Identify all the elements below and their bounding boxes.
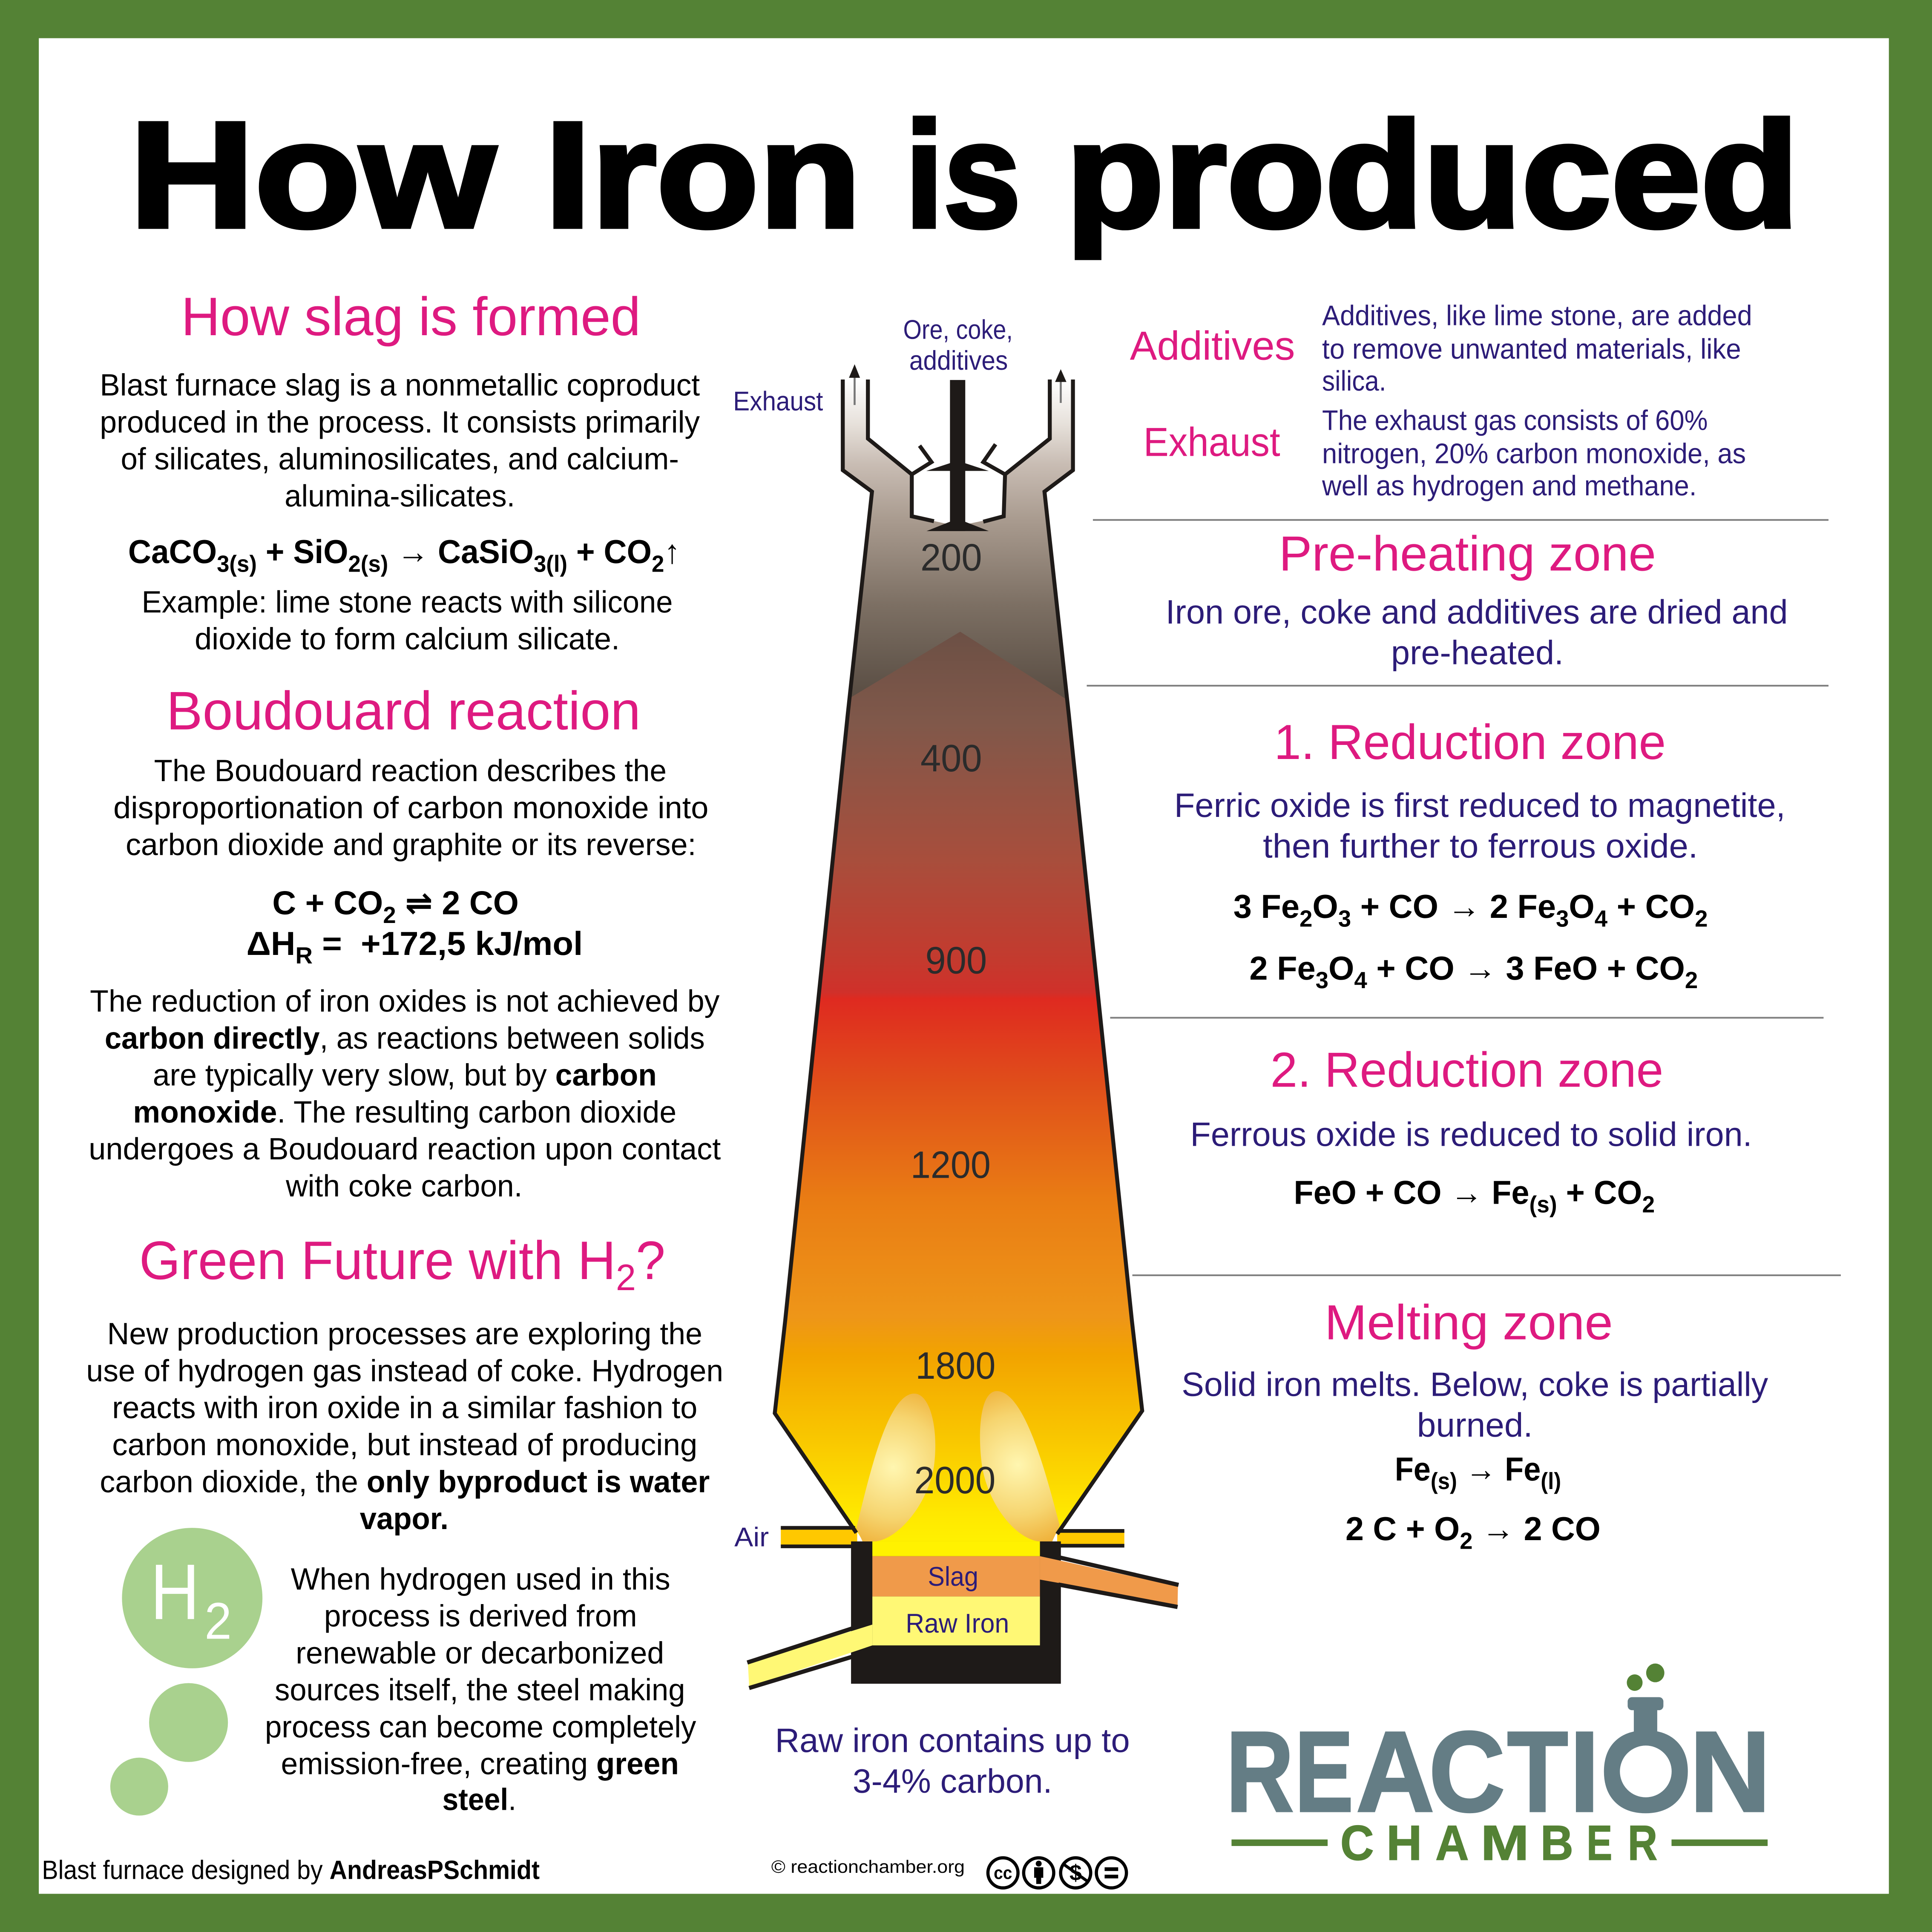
equation: slag formation: + SiO: [257, 534, 348, 570]
label: slag: Slag: [928, 1561, 978, 1592]
logo word: chamber: A: [1435, 1817, 1469, 1871]
text block: raw iron carbon note: [775, 1721, 1130, 1800]
label: air: Air: [734, 1522, 769, 1552]
icons: creative commons licence: [988, 1858, 1127, 1888]
logo word: reaction: N: [1690, 1708, 1771, 1836]
equation: boudouard: = +172,5 kJ/mol: [313, 926, 583, 962]
logo word: reaction: I: [1570, 1708, 1599, 1836]
logo word: chamber: H: [1386, 1817, 1422, 1871]
text block: slag description: [100, 368, 701, 514]
left air pipe: [781, 1528, 857, 1547]
title: [129, 91, 1799, 259]
title: is: [905, 91, 1021, 259]
equation: slag formation: 2(s): [348, 552, 388, 578]
panel: first reduction zone: [1174, 716, 1785, 995]
text block: pre-heating: [1166, 592, 1788, 672]
temperature labels: 400: [920, 737, 982, 780]
arrow: exhaust right: [1055, 369, 1067, 403]
equations: first reduction: 3: [1316, 969, 1328, 995]
title: produced: [1066, 91, 1799, 259]
equations: first reduction: 3 Fe: [1233, 888, 1300, 926]
equations: first reduction: 4: [1354, 969, 1368, 995]
text block: additives: silica.: [1322, 365, 1386, 397]
hearth: [851, 1541, 1061, 1684]
text block: hydrogen processes: vapor.: [360, 1502, 448, 1536]
logo word: chamber: R: [1628, 1817, 1657, 1871]
equations: first reduction: O: [1569, 888, 1595, 926]
equations: first reduction: 3: [1556, 907, 1569, 933]
equation: slag formation: + CO: [567, 534, 652, 570]
logo flask: [1613, 1664, 1679, 1805]
temperature labels: 2000: [914, 1459, 995, 1502]
equation: second reduction: (s): [1530, 1193, 1557, 1219]
arrow: exhaust left: [849, 364, 860, 405]
icon: non commercial: $: [1070, 1860, 1082, 1885]
furnace lower hot body: [775, 632, 1142, 1556]
icon: attribution: [1024, 1858, 1054, 1888]
equation: boudouard: R: [296, 944, 313, 970]
logo word: reaction: C: [1429, 1708, 1505, 1836]
text block: additives: Additives, like lime stone, are added: [1322, 299, 1752, 331]
equation: boudouard: C + CO: [272, 885, 384, 922]
blast furnace diagram: [733, 314, 1179, 1688]
equations: first reduction: O: [1312, 888, 1338, 926]
raw iron tap: [748, 1624, 872, 1688]
panel: how slag is formed: [100, 287, 701, 657]
text block: hydrogen processes: [86, 1317, 723, 1536]
flame right: [980, 1391, 1060, 1541]
text block: slag example: Example: lime stone reacts with silicone: [142, 585, 673, 620]
text block: melting: burned.: [1417, 1406, 1533, 1444]
text block: first reduction: Ferric oxide is first reduced to magnetite,: [1174, 786, 1785, 824]
text block: green steel: process can become completely: [265, 1710, 697, 1745]
text block: iron oxide reduction: [89, 984, 721, 1204]
equation: slag formation: 3(l): [534, 552, 567, 578]
label: raw iron: Raw Iron: [906, 1608, 1009, 1639]
temperature labels: 900: [926, 939, 987, 982]
text block: iron oxide reduction: carbon directly, as reactions between solids: [105, 1021, 705, 1056]
equation: boudouard: [247, 885, 583, 970]
logo word: chamber: M: [1481, 1817, 1529, 1871]
text block: second reduction: Ferrous oxide is reduced to solid iron.: [1190, 1115, 1752, 1153]
equation: slag formation: 3(s): [217, 552, 257, 578]
equations: melting: [1346, 1451, 1601, 1555]
equation: slag formation: 2: [652, 552, 664, 578]
equations: first reduction: 3: [1338, 907, 1351, 933]
title: How: [129, 91, 497, 259]
panel: melting zone: [1182, 1296, 1768, 1555]
charging rod and cones: [926, 380, 989, 531]
credit: furnace designer: Blast furnace designed by AndreasPSchmidt: [42, 1856, 540, 1885]
text block: hydrogen processes: use of hydrogen gas instead of coke. Hydrogen: [86, 1354, 723, 1389]
label: ore coke additives: [903, 314, 1013, 376]
icon: non commercial: [1061, 1858, 1091, 1888]
heading: green future: ?: [636, 1231, 665, 1291]
heading: green future: Green Future with H: [139, 1231, 627, 1291]
panel: exhaust: [1144, 404, 1746, 501]
icon: cc: cc: [994, 1864, 1012, 1884]
text block: first reduction: then further to ferrous oxide.: [1263, 827, 1698, 865]
text block: boudouard intro: carbon dioxide and graphite or its reverse:: [126, 828, 696, 862]
slag tap: [1040, 1556, 1179, 1607]
furnace outline: [775, 380, 1142, 1534]
temperature labels: [911, 536, 995, 1502]
equations: melting: (l): [1541, 1469, 1561, 1495]
text block: boudouard intro: disproportionation of carbon monoxide into: [113, 791, 708, 825]
right air pipe: [1057, 1530, 1124, 1547]
text block: slag example: [142, 585, 673, 657]
text block: pre-heating: pre-heated.: [1391, 633, 1564, 672]
temperature labels: 1800: [915, 1344, 995, 1387]
panel: additives: [1130, 299, 1752, 397]
equations: first reduction: O: [1328, 950, 1354, 987]
heading: melting zone: Melting zone: [1325, 1296, 1613, 1351]
text block: green steel: renewable or decarbonized: [296, 1636, 664, 1671]
equations: first reduction: 4: [1595, 907, 1608, 933]
text block: slag description: alumina-silicates.: [285, 479, 515, 514]
equation: slag formation: ↑: [664, 534, 680, 570]
text block: exhaust: [1321, 404, 1746, 501]
icon: cc: [988, 1858, 1018, 1888]
title: Iron: [545, 91, 861, 259]
text block: slag description: Blast furnace slag is a nonmetallic coproduct: [100, 368, 700, 403]
equations: melting: 2 C + O: [1346, 1511, 1461, 1547]
text block: iron oxide reduction: undergoes a Boudouard reaction upon contact: [89, 1133, 721, 1167]
equations: first reduction: + CO: [1607, 888, 1695, 926]
logo word: reaction: O: [1600, 1708, 1692, 1836]
temperature labels: 200: [920, 536, 982, 579]
label: ore coke additives: additives: [909, 345, 1008, 376]
logo word: reaction: T: [1507, 1708, 1568, 1836]
text block: raw iron carbon note: 3-4% carbon.: [853, 1762, 1052, 1800]
text block: green steel: emission-free, creating green: [281, 1747, 679, 1782]
equation: boudouard: ⇌ 2 CO: [396, 885, 519, 922]
text block: green steel: [265, 1562, 697, 1817]
text block: exhaust: nitrogen, 20% carbon monoxide, as: [1322, 437, 1746, 469]
temperature labels: 1200: [911, 1144, 991, 1187]
text block: additives: to remove unwanted materials, like: [1322, 333, 1741, 365]
text block: green steel: process is derived from: [324, 1599, 637, 1634]
equations: melting: → Fe: [1457, 1451, 1541, 1488]
text block: slag description: of silicates, aluminosilicates, and calcium-: [121, 443, 679, 477]
equation: boudouard: 2: [383, 903, 396, 929]
panel: second reduction zone: [1190, 1044, 1752, 1219]
text block: slag description: produced in the process. It consists primarily: [100, 405, 701, 440]
equations: first reduction: + CO → 3 FeO + CO: [1367, 950, 1685, 987]
equation: boudouard: ΔH: [247, 926, 294, 962]
text block: boudouard intro: The Boudouard reaction describes the: [154, 754, 667, 788]
heading: green future: 2: [616, 1258, 636, 1299]
equations: first reduction: 2: [1685, 969, 1698, 995]
equations: melting: 2: [1460, 1529, 1472, 1555]
equation: second reduction: FeO + CO → Fe: [1294, 1174, 1537, 1211]
heading: 2. reduction zone: 2. Reduction zone: [1271, 1044, 1663, 1098]
text block: iron oxide reduction: with coke carbon.: [285, 1169, 523, 1204]
text block: additives: [1322, 299, 1752, 397]
text block: melting: Solid iron melts. Below, coke is partially: [1182, 1365, 1768, 1403]
text block: slag example: dioxide to form calcium silicate.: [195, 622, 620, 657]
equations: melting: (s): [1431, 1469, 1457, 1495]
logo word: reaction: R: [1226, 1708, 1294, 1836]
text block: exhaust: The exhaust gas consists of 60%: [1322, 404, 1708, 436]
equations: first reduction: 2: [1300, 907, 1312, 933]
equations: first reduction: 2: [1695, 907, 1708, 933]
text block: hydrogen processes: reacts with iron oxide in a similar fashion to: [112, 1391, 697, 1426]
icon: hydrogen bubbles: 2: [204, 1592, 232, 1650]
text block: hydrogen processes: carbon monoxide, but instead of producing: [112, 1428, 697, 1463]
logo word: reaction: E: [1295, 1708, 1354, 1836]
logo: reaction chamber: [1226, 1664, 1771, 1871]
heading: 1. reduction zone: 1. Reduction zone: [1274, 716, 1666, 770]
text block: iron oxide reduction: The reduction of iron oxides is not achieved by: [90, 984, 720, 1019]
logo word: chamber: C: [1340, 1817, 1374, 1871]
logo word: chamber: B: [1541, 1817, 1573, 1871]
icon: hydrogen bubbles: H: [150, 1547, 200, 1636]
heading: additives: Additives: [1130, 323, 1295, 368]
flame left: [857, 1394, 935, 1541]
text block: raw iron carbon note: Raw iron contains up to: [775, 1721, 1130, 1760]
equations: first reduction: + CO → 2 Fe: [1351, 888, 1556, 926]
icon: no derivatives: [1096, 1858, 1127, 1888]
text block: melting: [1182, 1365, 1768, 1444]
text block: green steel: steel.: [443, 1783, 516, 1817]
icon: hydrogen bubbles: [110, 1528, 262, 1816]
heading: pre-heating zone: Pre-heating zone: [1279, 527, 1656, 581]
heading: how slag is formed: How slag is formed: [181, 287, 641, 348]
text block: hydrogen processes: carbon dioxide, the only byproduct is water: [100, 1465, 710, 1500]
equation: slag formation: → CaSiO: [388, 534, 534, 570]
equation: second reduction: 2: [1642, 1193, 1655, 1219]
label: ore coke additives: Ore, coke,: [903, 314, 1013, 345]
text block: exhaust: well as hydrogen and methane.: [1321, 469, 1696, 501]
equations: first reduction: 2 Fe: [1249, 950, 1316, 987]
text block: first reduction: [1174, 786, 1785, 865]
logo word: reaction: A: [1356, 1708, 1435, 1836]
copyright: © reactionchamber.org: [771, 1858, 965, 1878]
panel: green future with hydrogen: [86, 1231, 723, 1817]
heading: boudouard reaction: Boudouard reaction: [167, 681, 641, 742]
text block: hydrogen processes: New production processes are exploring the: [107, 1317, 702, 1351]
equations: first reduction: [1233, 888, 1708, 995]
text block: iron oxide reduction: monoxide. The resulting carbon dioxide: [133, 1095, 676, 1130]
heading: exhaust: Exhaust: [1144, 419, 1280, 465]
equations: melting: → 2 CO: [1472, 1511, 1601, 1547]
furnace upper gas body: [843, 380, 1073, 739]
label: exhaust: Exhaust: [733, 385, 823, 417]
text block: pre-heating: Iron ore, coke and additives are dried and: [1166, 592, 1788, 631]
text block: iron oxide reduction: are typically very slow, but by carbon: [153, 1058, 657, 1093]
equations: melting: Fe: [1395, 1451, 1434, 1488]
text block: boudouard intro: [113, 754, 708, 862]
equation: slag formation: CaCO: [128, 534, 221, 570]
logo word: chamber: E: [1587, 1817, 1612, 1871]
text block: green steel: sources itself, the steel making: [275, 1673, 685, 1708]
panel: pre-heating zone: [1166, 527, 1788, 672]
equation: second reduction: + CO: [1557, 1174, 1642, 1211]
text block: green steel: When hydrogen used in this: [291, 1562, 670, 1597]
panel: boudouard reaction: [89, 681, 721, 1204]
